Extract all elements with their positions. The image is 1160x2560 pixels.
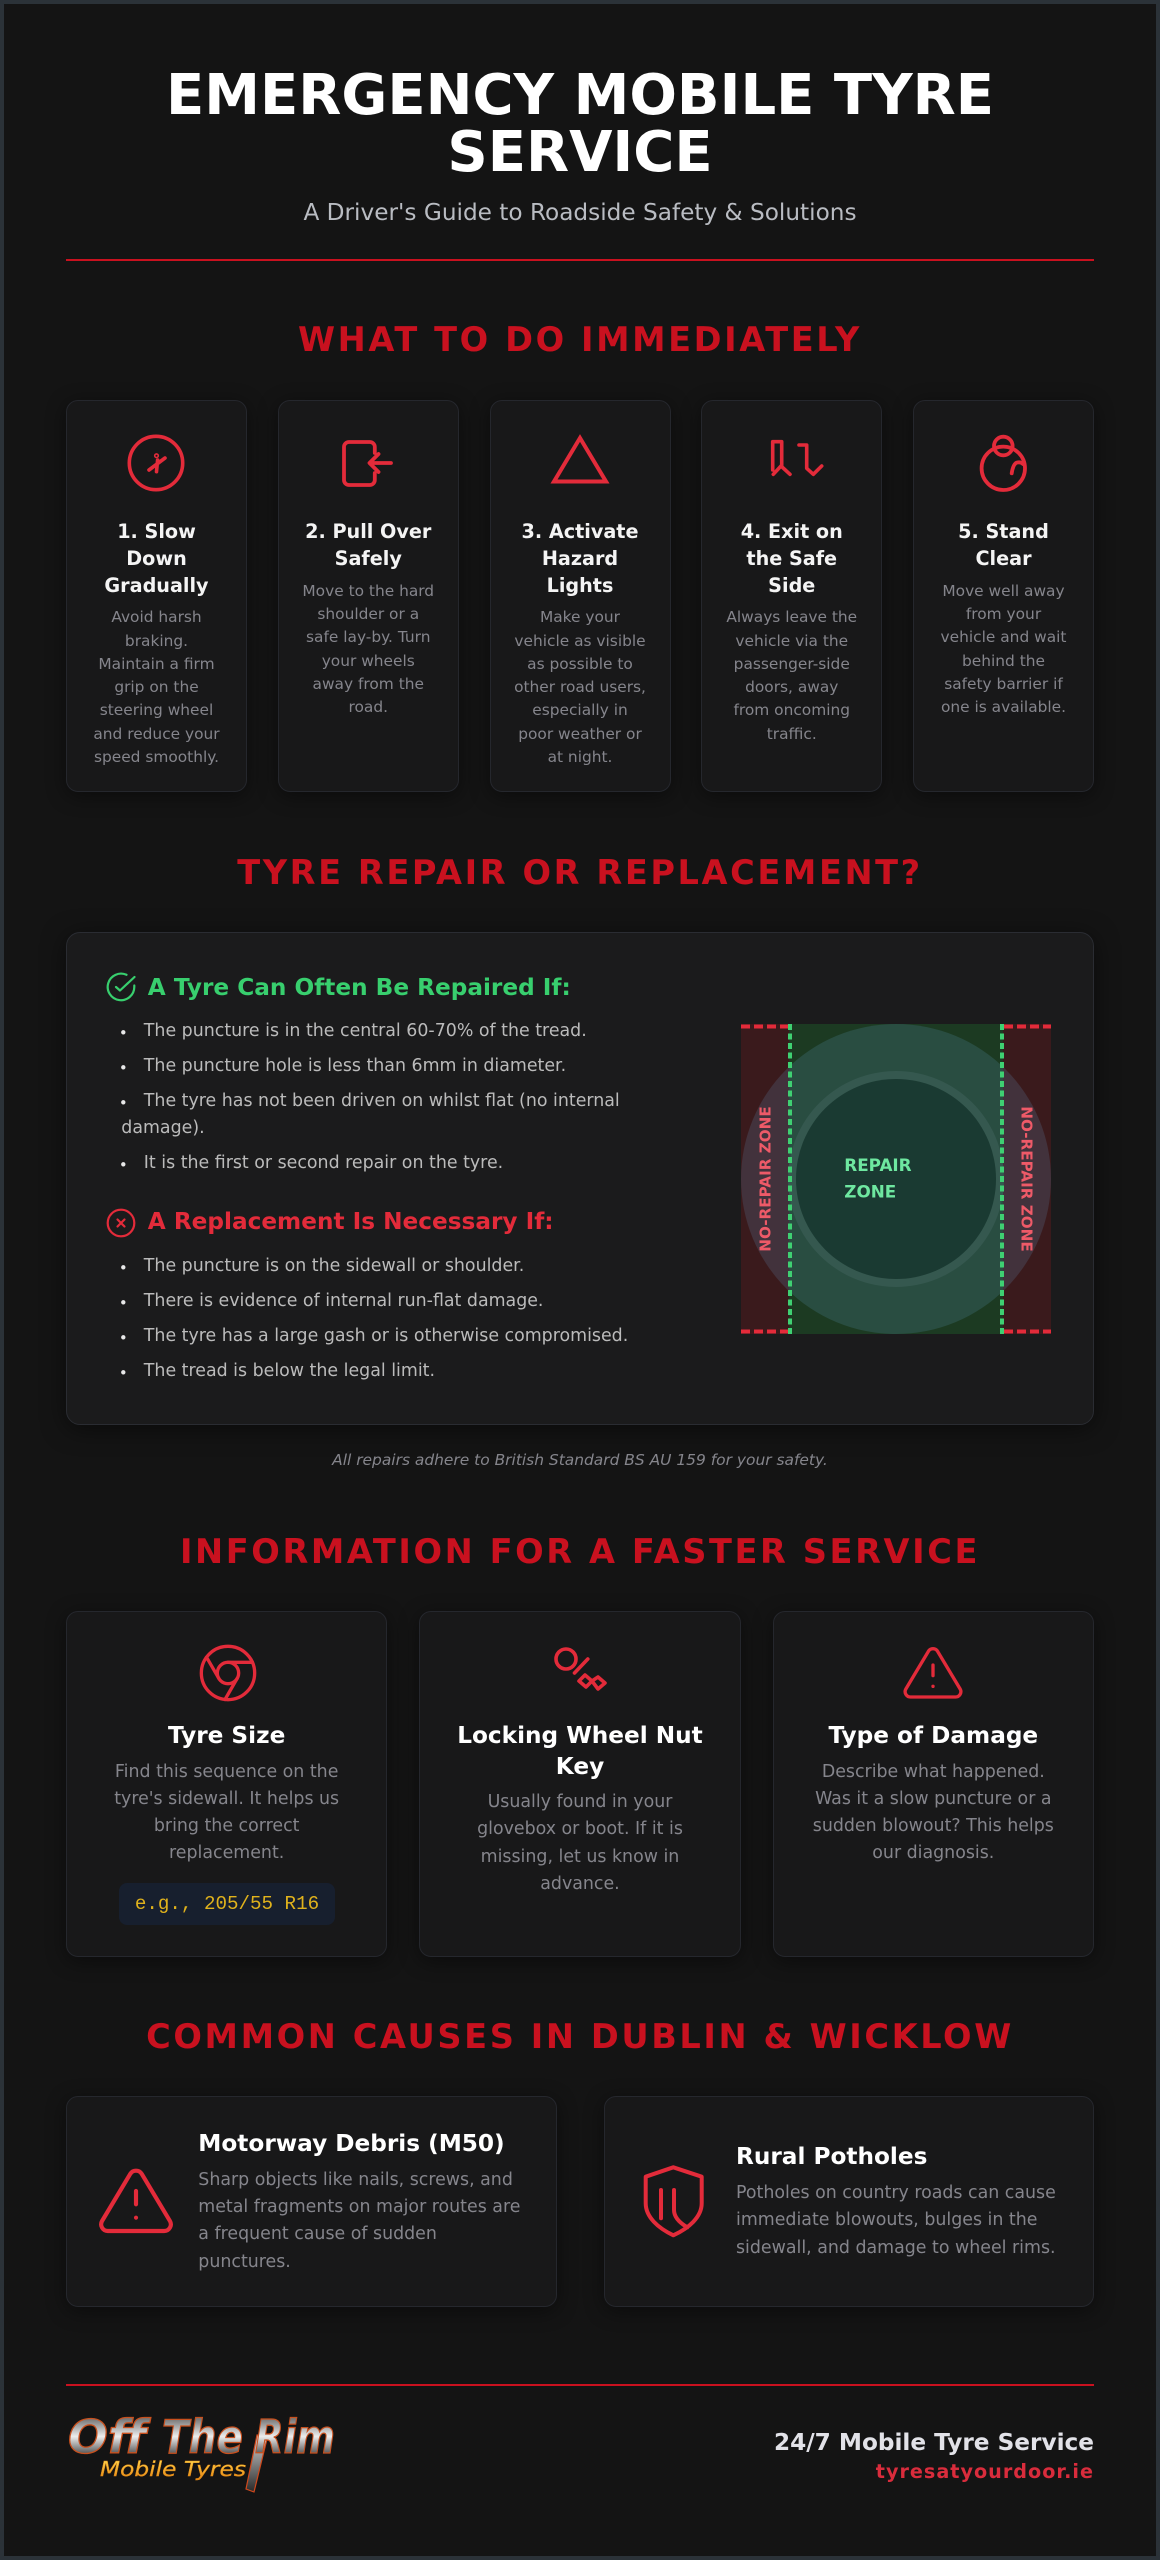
card text: sidewall, and damage to wheel rims. [736,2238,1056,2258]
step title [305,520,432,570]
step text: safe lay-by. Turn [306,628,430,646]
step text: from oncoming [733,701,850,719]
step title [104,520,209,597]
card text: advance. [540,1874,620,1894]
icon: key [554,1647,607,1691]
card text: Potholes on country roads can cause [736,2183,1056,2203]
heading: common causes: COMMON CAUSES IN DUBLIN & WICKLOW [146,2016,1014,2056]
card text: Find this sequence on the [115,1762,338,1782]
step title: the Safe [746,547,837,570]
diagram: tyre repair zones: REPAIR [844,1154,912,1174]
heading: information for a faster service: INFORMATION FOR A FASTER SERVICE [180,1532,980,1571]
step text: away from the [313,675,424,693]
step text: Maintain a firm [98,655,215,673]
step title: 5. Stand [958,520,1049,543]
card title: Key [556,1753,604,1780]
title [166,63,994,185]
panel: locking wheel nut key [419,1611,741,1957]
step text: vehicle and wait [941,628,1066,646]
card text: missing, let us know in [481,1847,679,1867]
step text: vehicle via the [735,632,848,650]
panel: step 1 slow down [66,400,247,792]
card title: Tyre Size [168,1722,285,1749]
icon: exit paths [770,440,824,476]
card text: metal fragments on major routes are [198,2197,520,2217]
step text: vehicle as visible [514,632,646,650]
step text: one is available. [941,698,1066,716]
card title: Type of Damage [828,1722,1038,1749]
logo: off the rim: Mobile Tyres [100,2457,246,2481]
step title: Clear [975,547,1032,570]
step title: 4. Exit on [741,520,843,543]
step text: especially in [532,701,628,719]
step text: safety barrier if [944,675,1063,693]
list item: The puncture is on the sidewall or shoulder. [144,1256,524,1276]
step text [93,608,220,766]
step text: poor weather or [518,725,642,743]
step title: Hazard [542,547,618,570]
list item: damage). [121,1118,205,1138]
step text: speed smoothly. [94,748,219,766]
icon: wheel [200,1644,256,1702]
step title: 2. Pull Over [305,520,431,543]
step text: behind the [962,652,1045,670]
step title [741,520,843,597]
card title: Motorway Debris (M50) [198,2130,505,2157]
step text: doors, away [745,678,838,696]
footer: service line: 24/7 Mobile Tyre Service [774,2428,1094,2456]
panel: motorway debris [66,2096,557,2307]
list item: It is the first or second repair on the tyre. [144,1152,503,1172]
diagram: tyre repair zones: NO-REPAIR ZONE [757,1106,775,1251]
diagram: tyre repair zones: ZONE [844,1181,896,1201]
step text: Avoid harsh [111,608,202,626]
card text [736,2183,1056,2258]
step text: at night. [548,748,612,766]
logo: off the rim: Rim [255,2410,335,2464]
step text: shoulder or a [317,605,419,623]
step title: 3. Activate [522,520,638,543]
subtitle: A Driver's Guide to Roadside Safety & Solutions [303,199,857,226]
title: SERVICE [447,120,713,185]
step text: from your [966,605,1041,623]
card text: our diagnosis. [872,1843,994,1863]
step text: other road users, [514,678,646,696]
heading: tyre repair or replacement: TYRE REPAIR OR REPLACEMENT? [237,852,923,892]
step title: Safely [335,547,402,570]
step text [726,608,857,743]
card text: Describe what happened. [822,1762,1045,1782]
step text: road. [348,698,388,716]
list item: The tread is below the legal limit. [144,1361,435,1381]
icon: exit arrow [342,440,393,487]
step text: braking. [125,632,188,650]
icon: person ring [980,434,1027,492]
step text: grip on the [114,678,199,696]
step title: Lights [547,574,613,597]
card text: Sharp objects like nails, screws, and [198,2170,513,2190]
card text [813,1762,1054,1863]
diagram: tyre repair zones: NO-REPAIR ZONE [1018,1106,1036,1251]
panel: step 5 stand clear [913,400,1094,792]
diagram: tyre repair zones [741,1024,1051,1334]
step text: and reduce your [93,725,220,743]
step text [514,608,646,766]
heading: what to do immediately: WHAT TO DO IMMEDIATELY [298,320,862,359]
list item: • [119,1059,128,1077]
heading: replacement necessary: A Replacement Is Necessary If: [148,1208,554,1235]
icon: warning triangle [99,2168,173,2234]
card text: bring the correct [154,1816,299,1836]
panel: type of damage [773,1611,1094,1957]
logo: off the rim [68,2410,335,2493]
icon: warning triangle [903,1647,963,1699]
list item: The tyre has not been driven on whilst flat (no internal [144,1091,620,1111]
card title: Locking Wheel Nut [457,1722,703,1749]
card text: glovebox or boot. If it is [477,1819,683,1839]
list item: The puncture is in the central 60-70% of the tread. [144,1021,587,1041]
step text: Make your [540,608,620,626]
icon: green check circle [106,972,136,1002]
card text: sudden blowout? This helps [813,1816,1054,1836]
card text [477,1792,683,1894]
card text [114,1762,339,1863]
card text: Was it a slow puncture or a [815,1789,1052,1809]
list item [119,1091,620,1138]
panel: step 4 exit safe side [701,400,882,792]
icon: red cross circle [106,1208,136,1238]
footer: website: tyresatyourdoor.ie [876,2460,1094,2483]
step title: 1. Slow [117,520,196,543]
list item: There is evidence of internal run-flat damage. [144,1291,543,1311]
panel: step 2 pull over [278,400,459,792]
step title: Gradually [104,574,209,597]
icon: triangle [550,434,610,484]
panel: step 3 hazard lights [490,400,670,792]
step text: Always leave the [726,608,857,626]
card text: Usually found in your [488,1792,672,1812]
panel: repair or replacement [66,932,1094,1425]
list item: • [119,1156,128,1174]
card text: punctures. [198,2252,291,2272]
step title: Side [768,574,815,597]
list item: • [119,1294,128,1312]
list item: • [119,1094,128,1112]
list item: • [119,1364,128,1382]
step title [522,520,638,597]
list item: The puncture hole is less than 6mm in diameter. [144,1056,566,1076]
icon: gauge [128,434,184,492]
icon: shield [644,2165,704,2238]
step text: Move well away [942,582,1065,600]
card text: replacement. [169,1843,284,1863]
logo: off the rim: The [162,2410,243,2464]
list item: The tyre has a large gash or is otherwise compromised. [144,1326,628,1346]
step title [958,520,1049,570]
step text [941,582,1066,716]
heading: can be repaired: A Tyre Can Often Be Repaired If: [148,974,571,1000]
code example [119,1883,335,1925]
logo: off the rim: Off [68,2410,152,2464]
step text: passenger-side [734,655,850,673]
card text: tyre's sidewall. It helps us [114,1789,339,1809]
card title [457,1722,703,1780]
step text: traffic. [767,725,817,743]
step text: Move to the hard [302,582,434,600]
panel: rural potholes [604,2096,1094,2307]
code example: e.g., 205/55 R16 [135,1893,319,1915]
step text [302,582,434,716]
step text: your wheels [322,652,415,670]
card text [198,2170,520,2272]
list item: • [119,1259,128,1277]
card title: Rural Potholes [736,2143,927,2170]
card text: immediate blowouts, bulges in the [736,2210,1037,2230]
note: british standard: All repairs adhere to British Standard BS AU 159 for your safety. [332,1451,828,1469]
list item: • [119,1329,128,1347]
title: EMERGENCY MOBILE TYRE [166,63,994,128]
card text: a frequent cause of sudden [198,2224,437,2244]
list item: • [119,1024,128,1042]
panel: tyre size [66,1611,387,1957]
step text: as possible to [527,655,633,673]
step text: steering wheel [100,701,213,719]
step title: Down [126,547,187,570]
